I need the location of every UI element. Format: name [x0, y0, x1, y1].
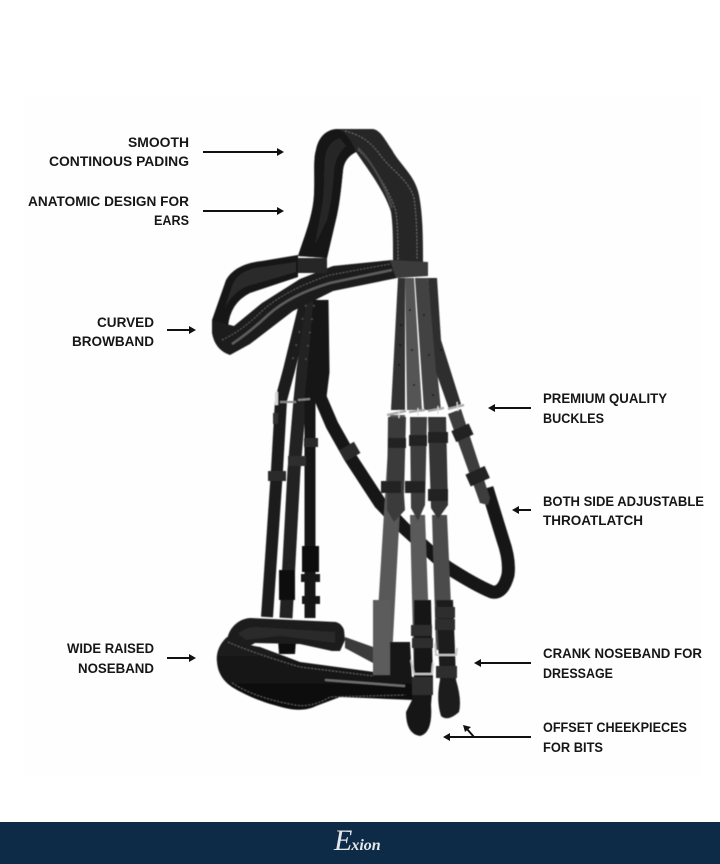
browband highlight — [232, 270, 392, 344]
arrow: smooth padding — [203, 148, 284, 156]
overlay leather tips — [387, 417, 406, 522]
label: both side adjustable throatlatch: BOTH SIDE ADJUSTABLE — [543, 494, 704, 509]
strap 3 — [415, 278, 441, 410]
arrow: offset cheekpieces — [443, 725, 531, 741]
keepers — [381, 423, 490, 501]
arrow: anatomic design — [203, 207, 284, 215]
chin strap — [345, 637, 373, 663]
nose main band — [217, 637, 414, 710]
label: curved browband — [72, 315, 154, 349]
noseband — [217, 600, 414, 710]
browband front band — [212, 260, 397, 355]
left keepers and buckles — [268, 392, 323, 604]
arrow: crank noseband — [474, 659, 531, 667]
footer bar — [0, 822, 720, 864]
label: both side adjustable throatlatch: THROATLATCH — [543, 513, 643, 528]
label: offset cheekpieces for bits — [543, 720, 687, 755]
strap 4 — [428, 278, 461, 409]
label: offset cheekpieces for bits: OFFSET CHEEKPIECES — [543, 720, 687, 735]
label: crank noseband for dressage: DRESSAGE — [543, 666, 613, 681]
label: smooth continous pading: CONTINOUS PADING — [49, 154, 189, 169]
label: smooth continous pading — [49, 135, 189, 169]
browband back pad — [212, 255, 298, 327]
label: wide raised noseband: NOSEBAND — [78, 661, 154, 676]
label: curved browband: BROWBAND — [72, 334, 154, 349]
label: premium quality buckles: PREMIUM QUALITY — [543, 391, 667, 406]
crank back pad — [227, 618, 345, 651]
label: curved browband: CURVED — [97, 315, 154, 330]
label: crank noseband for dressage — [543, 646, 702, 681]
label: premium quality buckles — [543, 391, 667, 426]
label: offset cheekpieces for bits: FOR BITS — [543, 740, 603, 755]
label: wide raised noseband: WIDE RAISED — [67, 641, 154, 656]
label: smooth continous pading: SMOOTH — [128, 135, 189, 150]
label: anatomic design for ears: EARS — [154, 213, 189, 228]
label: crank noseband for dressage: CRANK NOSEBAND FOR — [543, 646, 702, 661]
label: premium quality buckles: BUCKLES — [543, 411, 604, 426]
arrow: throatlatch — [512, 506, 531, 514]
label: anatomic design for ears — [28, 194, 189, 228]
label: wide raised noseband — [67, 641, 154, 676]
label: both side adjustable throatlatch — [543, 494, 704, 528]
cheek ends and buckles — [406, 600, 460, 736]
label: anatomic design for ears: ANATOMIC DESIGN FOR — [28, 194, 189, 209]
strap 1 — [391, 278, 405, 410]
bridle photo — [212, 129, 508, 736]
browband keepers — [298, 258, 327, 273]
buckles — [387, 405, 464, 415]
arrow: wide noseband — [167, 654, 196, 662]
crown piece — [298, 129, 423, 262]
footer logo: Exion — [333, 824, 381, 857]
throatlatch — [320, 300, 508, 592]
right cheek straps — [374, 278, 490, 680]
arrow: buckles — [488, 404, 531, 412]
curved browband — [212, 255, 428, 355]
left cheek straps — [267, 300, 323, 618]
arrow: curved browband — [167, 326, 196, 334]
strap 2 — [405, 278, 422, 410]
